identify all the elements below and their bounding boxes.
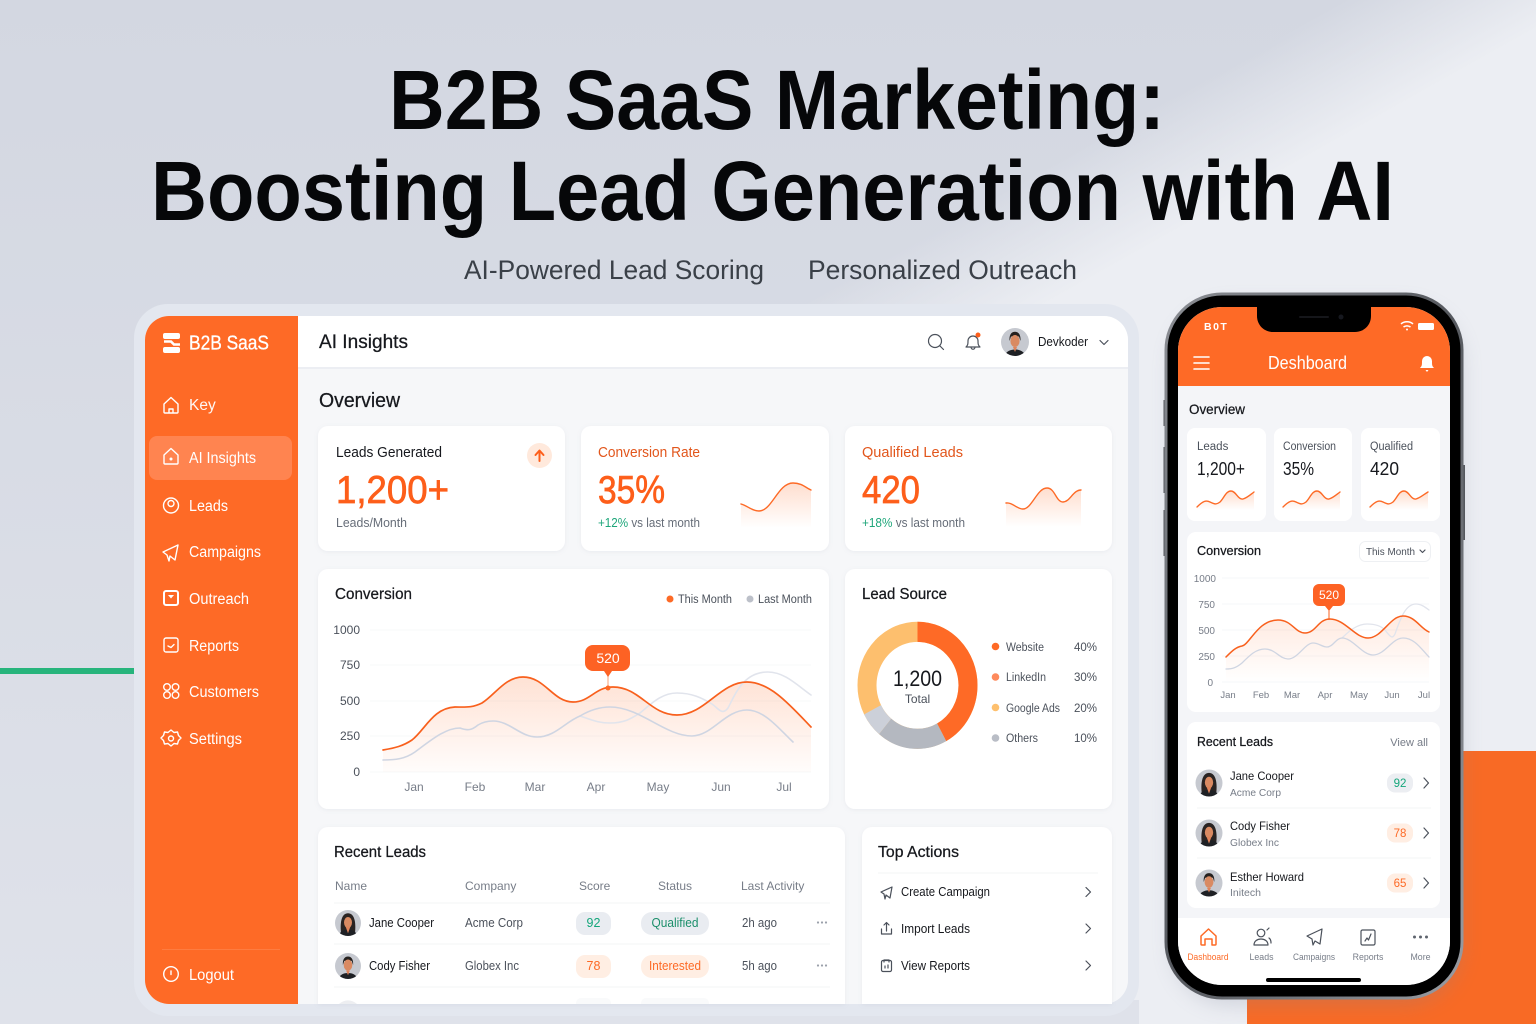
nav: Customers — [164, 684, 259, 701]
table header — [335, 879, 804, 893]
nav: Outreach: Outreach — [189, 591, 249, 608]
lead: Esther Howard — [1196, 870, 1428, 899]
nav: Leads — [164, 498, 228, 515]
sparkline — [1006, 488, 1081, 527]
nav: Logout: Logout — [189, 967, 235, 984]
subtitle: Personalized Outreach — [808, 255, 1077, 285]
phone card: leads: 1,200+ — [1197, 459, 1245, 479]
donut chart: Total — [905, 692, 930, 706]
row: Cody Fisher: Globex Inc — [465, 959, 519, 973]
line: this month — [1226, 616, 1429, 657]
card: leads generated: Leads/Month — [336, 516, 407, 530]
page heading: AI Insights — [319, 332, 408, 353]
icon: bell solid — [1420, 356, 1434, 372]
icon: battery — [1418, 323, 1434, 330]
y axis labels: 500 — [340, 694, 360, 708]
y axis labels: 1000 — [1194, 574, 1216, 585]
card: leads generated: Leads Generated — [336, 445, 442, 461]
panel: lead source: Lead Source — [862, 586, 947, 603]
legend — [666, 594, 812, 606]
icon: up arrow — [527, 443, 552, 468]
legend: Others — [1006, 733, 1038, 745]
phone header — [1178, 307, 1450, 386]
tooltip 520 — [1313, 584, 1345, 620]
title: B2B SaaS Marketing: — [389, 53, 1165, 147]
table header: Last Activity — [741, 879, 804, 893]
x axis labels: May — [647, 780, 669, 794]
card: conversion rate: +12% vs last month — [598, 516, 700, 530]
phone card: qualified — [1361, 428, 1440, 521]
legend: 20% — [1074, 703, 1097, 715]
phone overview heading: Overview — [1189, 401, 1246, 417]
y axis labels: 0 — [353, 765, 360, 779]
card: leads generated — [318, 426, 565, 551]
subtitle — [464, 255, 1077, 285]
phone panel: conversion chart: Conversion — [1197, 543, 1261, 558]
sidebar — [145, 316, 298, 1004]
panel: recent leads table: Recent Leads — [334, 844, 426, 861]
line: last month A — [383, 707, 793, 760]
nav: AI Insights active: AI Insights — [189, 450, 256, 467]
table header: Score — [579, 879, 611, 893]
action: view reports — [882, 959, 1090, 973]
x axis labels: Jul — [776, 780, 792, 794]
x axis labels: Feb — [465, 780, 486, 794]
title — [151, 53, 1394, 238]
row: Jane Cooper: Qualified — [652, 916, 699, 930]
user name: Devkoder — [1038, 335, 1088, 349]
action: create campaign — [881, 885, 1090, 899]
tab: Leads: Leads — [1250, 952, 1274, 962]
legend — [992, 642, 1097, 745]
x axis labels: Jul — [1418, 690, 1430, 701]
donut chart — [867, 632, 968, 739]
nav: Campaigns: Campaigns — [189, 544, 261, 561]
nav: AI Insights active — [149, 436, 292, 480]
y axis labels: 250 — [340, 729, 360, 743]
phone card: leads: Leads — [1197, 441, 1229, 453]
sparkline — [741, 483, 811, 528]
donut chart: 1,200 — [893, 666, 942, 691]
overview heading: Overview — [319, 390, 401, 412]
nav: Reports — [164, 638, 239, 655]
row: Jane Cooper: 2h ago — [742, 916, 777, 930]
tab: Dashboard — [1188, 929, 1229, 962]
y axis labels — [1194, 575, 1216, 686]
action: create campaign: Create Campaign — [901, 885, 990, 899]
phone screen — [1178, 307, 1450, 985]
nav: Leads: Leads — [189, 498, 228, 515]
phone card: qualified: 420 — [1370, 459, 1399, 479]
row: Cody Fisher: Interested — [649, 959, 701, 973]
y axis labels: 750 — [340, 658, 360, 672]
tab: More: More — [1410, 952, 1431, 962]
x axis labels: May — [1350, 690, 1368, 701]
icon: bell — [966, 332, 980, 349]
home indicator — [1266, 978, 1361, 982]
x axis labels: Jan — [1220, 690, 1236, 701]
phone bottom nav — [1178, 918, 1450, 985]
lead: Jane Cooper — [1196, 769, 1428, 799]
phone mockup — [1164, 294, 1465, 1005]
lead: Cody Fisher — [1196, 819, 1428, 849]
user avatar — [1001, 328, 1029, 356]
phone panel: recent leads: Recent Leads — [1197, 734, 1273, 749]
row: Cody Fisher — [335, 953, 827, 979]
card: qualified leads — [845, 426, 1112, 551]
panel: recent leads table — [318, 827, 845, 1004]
x axis labels: Apr — [587, 780, 605, 794]
card: leads generated: 1,200+ — [336, 469, 449, 512]
accent: orange block — [1247, 751, 1536, 1024]
lead: Esther Howard: Esther Howard — [1230, 870, 1304, 884]
brand logo — [163, 332, 269, 354]
area: this month — [383, 677, 811, 772]
panel: lead source — [845, 569, 1112, 809]
nav: Key: Key — [189, 397, 216, 414]
x axis labels — [404, 780, 792, 794]
tab: Dashboard: Dashboard — [1188, 952, 1229, 962]
row: Cody Fisher: 5h ago — [742, 959, 777, 973]
dropdown: This Month — [1366, 547, 1415, 558]
x axis labels: Mar — [1284, 690, 1300, 701]
tab: More — [1410, 936, 1431, 962]
tooltip 520: 520 — [596, 650, 620, 666]
dropdown — [1360, 542, 1430, 562]
area — [1226, 616, 1429, 664]
card: conversion rate: Conversion Rate — [598, 445, 700, 461]
line: last month B — [1342, 604, 1429, 638]
card: conversion rate — [581, 426, 829, 551]
phone shadow — [1172, 305, 1462, 1005]
legend: Google Ads — [1006, 703, 1060, 715]
tab: Campaigns — [1293, 929, 1336, 962]
y axis labels: 250 — [1198, 652, 1215, 663]
panel: top actions — [862, 827, 1112, 1004]
table header: Status — [658, 879, 692, 893]
panel: conversion chart: Conversion — [335, 586, 412, 603]
y axis labels — [333, 623, 360, 779]
card: qualified leads: Qualified Leads — [862, 445, 963, 461]
legend: 30% — [1074, 672, 1097, 684]
nav: Reports: Reports — [189, 638, 239, 655]
y axis labels: 750 — [1198, 600, 1215, 611]
user name — [1038, 336, 1109, 346]
x axis labels: Mar — [525, 780, 545, 794]
phone side buttons — [1164, 400, 1465, 556]
line: this month — [383, 677, 811, 750]
tooltip 520: 520 — [1319, 588, 1339, 602]
lead: Jane Cooper: 92 — [1394, 778, 1406, 790]
y axis labels: 500 — [1198, 626, 1215, 637]
row: Cody Fisher: Cody Fisher — [369, 959, 430, 973]
phone header: Deshboard — [1268, 353, 1347, 373]
tab: Campaigns: Campaigns — [1293, 952, 1336, 962]
lead: Cody Fisher: Cody Fisher — [1230, 819, 1290, 833]
lead: Jane Cooper: Jane Cooper — [1230, 769, 1294, 783]
x axis labels — [1220, 692, 1430, 700]
x axis labels: Jun — [711, 780, 731, 794]
y axis labels: 1000 — [333, 623, 360, 637]
action: import leads: Import Leads — [901, 922, 970, 936]
card: conversion rate: 35% — [598, 469, 665, 512]
legend: Last Month — [758, 594, 812, 606]
card: qualified leads: +18% vs last month — [862, 516, 965, 530]
x axis labels: Jun — [1384, 690, 1400, 701]
table header: Name — [335, 879, 367, 893]
phone card: leads — [1187, 428, 1266, 521]
tooltip 520 — [585, 645, 630, 690]
nav: Settings — [161, 730, 242, 748]
panel: top actions: Top Actions — [878, 844, 959, 861]
lead: Cody Fisher: 78 — [1394, 828, 1406, 840]
nav: Campaigns — [163, 544, 261, 561]
row: Cody Fisher: 78 — [587, 959, 600, 973]
legend: LinkedIn — [1006, 672, 1046, 684]
lead: Esther Howard: 65 — [1394, 878, 1406, 890]
row: faded third lead — [339, 998, 709, 1004]
phone panel: recent leads — [1187, 722, 1440, 908]
row: Jane Cooper: Jane Cooper — [369, 916, 434, 930]
brand logo: B2B SaaS — [189, 332, 269, 354]
phone card: conversion — [1274, 428, 1352, 521]
phone notch — [1257, 307, 1371, 332]
title: Boosting Lead Generation with AI — [151, 144, 1394, 238]
x axis labels: Apr — [1318, 690, 1332, 701]
legend: 40% — [1074, 642, 1097, 654]
y axis labels: 0 — [1207, 678, 1213, 689]
legend: Website — [1006, 642, 1044, 654]
phone card: conversion: 35% — [1283, 459, 1314, 479]
subtitle: AI-Powered Lead Scoring — [464, 255, 764, 285]
row: Jane Cooper: Acme Corp — [465, 916, 523, 930]
lead: Cody Fisher: Globex Inc — [1230, 837, 1279, 849]
phone card: conversion: Conversion — [1283, 441, 1336, 453]
card: qualified leads: 420 — [862, 469, 920, 512]
panel: conversion chart — [318, 569, 829, 809]
phone body — [1166, 294, 1462, 998]
nav: Outreach — [164, 591, 249, 608]
tab: Leads — [1250, 928, 1274, 962]
lead: Esther Howard: Initech — [1230, 887, 1261, 899]
nav: Logout — [164, 967, 235, 984]
action: import leads — [882, 922, 1090, 936]
phone card: qualified: Qualified — [1370, 441, 1413, 453]
accent: green line — [0, 668, 135, 674]
icon: menu — [1194, 357, 1209, 369]
phone panel: recent leads: View all — [1390, 737, 1428, 749]
icon: search — [928, 334, 944, 350]
lead: Jane Cooper: Acme Corp — [1230, 787, 1281, 799]
legend: This Month — [678, 594, 732, 606]
phone panel: conversion chart — [1187, 532, 1440, 712]
nav: Customers: Customers — [189, 684, 259, 701]
nav: Settings: Settings — [189, 731, 242, 748]
tab: Reports: Reports — [1353, 952, 1384, 962]
top bar — [298, 316, 1128, 369]
tab: Reports — [1353, 930, 1384, 962]
nav: Key — [164, 397, 216, 414]
x axis labels: Jan — [404, 780, 424, 794]
row: Jane Cooper: 92 — [587, 916, 600, 930]
x axis labels: Feb — [1253, 690, 1269, 701]
legend: 10% — [1074, 733, 1097, 745]
table header: Company — [465, 879, 516, 893]
icon: wifi — [1401, 322, 1413, 327]
desktop dashboard frame — [134, 304, 1139, 1016]
phone header: B0T — [1204, 321, 1228, 333]
row: Jane Cooper — [335, 910, 827, 936]
line: last month A — [1226, 638, 1429, 669]
line: last month B — [580, 672, 811, 723]
action: view reports: View Reports — [901, 959, 970, 973]
